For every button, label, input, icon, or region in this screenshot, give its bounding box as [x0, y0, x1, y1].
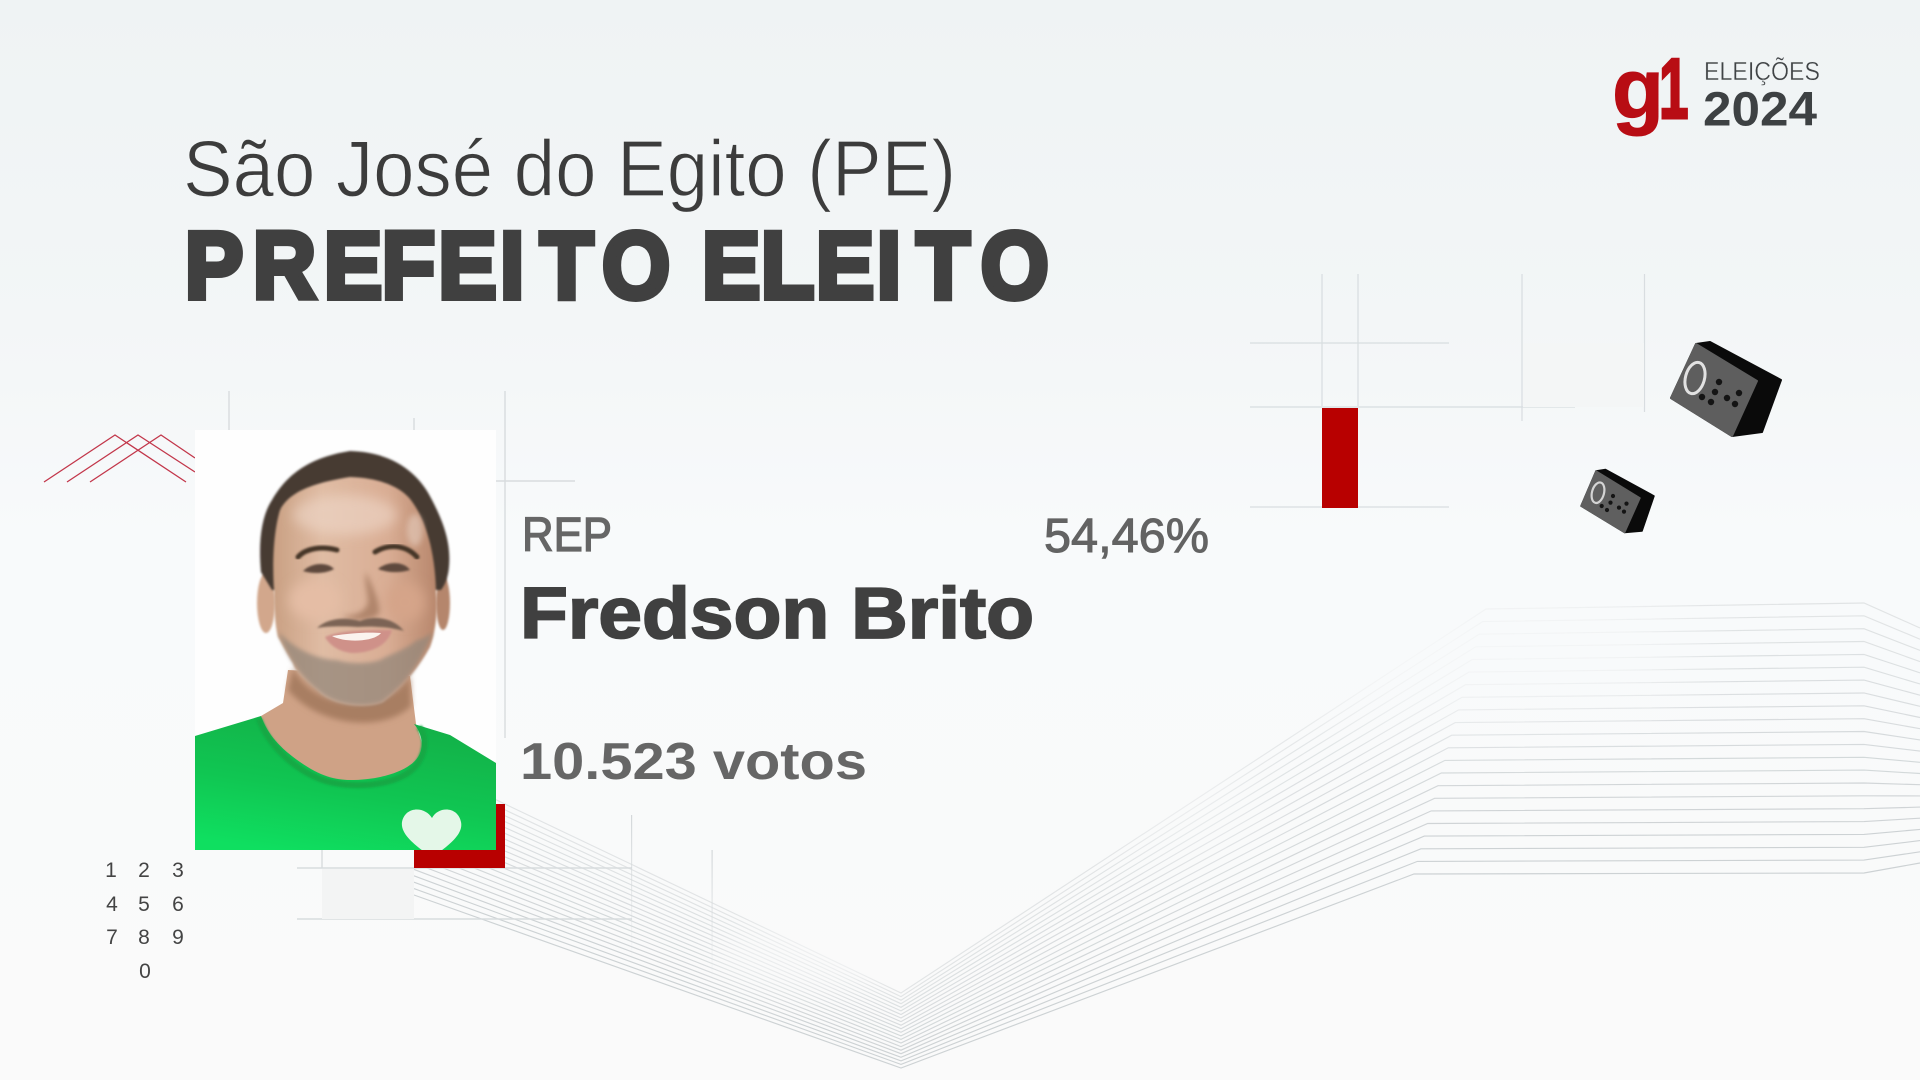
nose shadow: [342, 572, 379, 620]
number keypad: 6: [172, 893, 184, 916]
party: REP: [522, 509, 612, 562]
icon: small braille die: [1581, 470, 1654, 532]
right temple highlight: [407, 514, 423, 546]
neck: [261, 670, 422, 780]
right grid lines: [1250, 274, 1644, 507]
number keypad: 5: [138, 893, 150, 916]
eyebrows: [298, 547, 417, 557]
left grid lines: [229, 391, 713, 980]
heart on shirt: [402, 810, 462, 850]
shirt: [195, 716, 496, 850]
candidate name: Fredson Brito: [520, 574, 1034, 654]
icon: large braille die: [1671, 342, 1781, 436]
logo: g1 Eleições 2024: 2024: [1703, 84, 1817, 136]
number keypad: [105, 859, 184, 983]
red corner block behind photo: [414, 804, 505, 868]
logo: g1 Eleições 2024: g: [1612, 42, 1664, 137]
number keypad: 7: [106, 926, 118, 949]
red mountain lines: [44, 435, 195, 482]
hair: [260, 451, 449, 590]
left cheek: [288, 584, 315, 616]
grey block under photo: [322, 869, 414, 919]
faint grey block: [1523, 343, 1644, 407]
mouth: [325, 630, 392, 653]
face: [273, 477, 437, 706]
shirt collar: [259, 719, 425, 785]
number keypad: 9: [172, 926, 184, 949]
eyes: [303, 563, 410, 573]
heading: prefeito eleito: PREFEITO ELEITO: [185, 213, 1049, 319]
number keypad: 4: [106, 893, 118, 916]
background line fan: [414, 603, 1920, 1068]
number keypad: 1: [105, 859, 117, 882]
number keypad: 0: [139, 960, 151, 983]
number keypad: 3: [172, 859, 184, 882]
forehead highlight: [293, 495, 397, 535]
vote count: 10.523 votos: [520, 733, 867, 791]
logo: g1 Eleições 2024: [1612, 41, 1820, 137]
red bar: [1322, 408, 1358, 508]
right cheek: [404, 586, 426, 618]
candidate photo: [195, 430, 496, 858]
vote percentage: 54,46%: [1044, 510, 1209, 563]
number keypad: 8: [138, 926, 150, 949]
teeth: [332, 633, 381, 641]
number keypad: 2: [138, 859, 150, 882]
beard: [278, 632, 433, 706]
ears: [257, 573, 275, 633]
title: city: São José do Egito (PE): [183, 124, 956, 213]
logo: g1 Eleições 2024: ELEIÇÕES: [1704, 56, 1820, 86]
logo: g1 Eleições 2024: 1: [1659, 41, 1688, 136]
mustache: [317, 618, 404, 631]
